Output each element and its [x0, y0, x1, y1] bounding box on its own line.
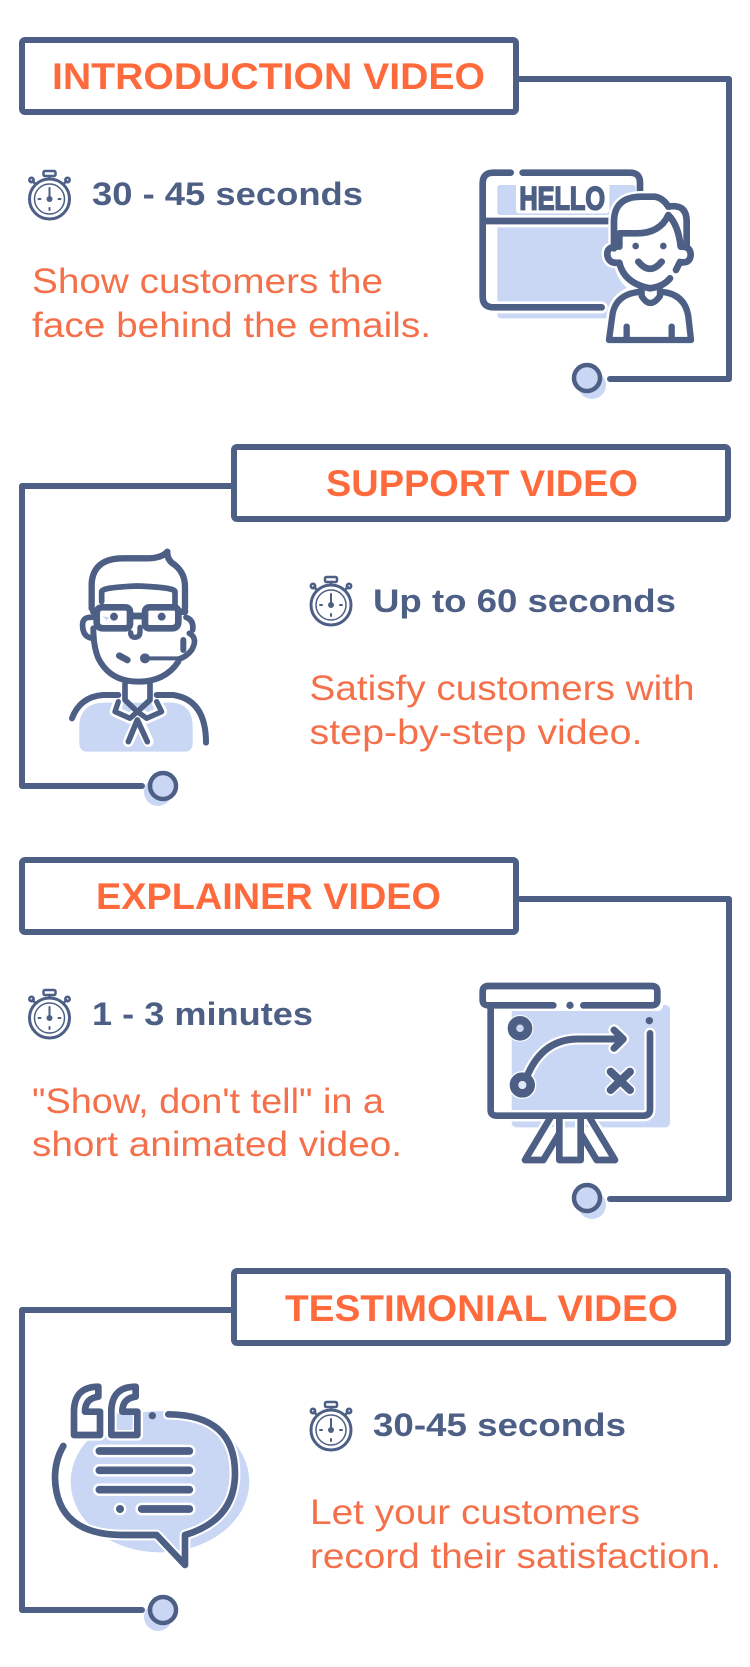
connector line: [22, 486, 233, 786]
duration text: 30-45 seconds: [373, 1407, 626, 1443]
node circle: [574, 365, 606, 399]
panel: testimonial video: [22, 1271, 728, 1631]
description: face behind the emails.: [32, 306, 431, 345]
icon: stopwatch: [29, 171, 70, 219]
description: "Show, don't tell" in a: [32, 1082, 385, 1121]
connector line: [520, 79, 729, 379]
description: step-by-step video.: [310, 713, 642, 752]
description: Let your customers: [310, 1493, 640, 1532]
node circle: [574, 1185, 606, 1219]
icon: stopwatch: [311, 1402, 351, 1450]
description: short animated video.: [32, 1125, 402, 1164]
heading box: INTRODUCTION VIDEO: [52, 56, 485, 97]
duration text: 30 - 45 seconds: [92, 176, 363, 212]
heading box: [234, 1271, 728, 1343]
description: [32, 1082, 402, 1164]
icon: speech bubble with quotes: [55, 1387, 249, 1565]
duration text: 1 - 3 minutes: [92, 996, 313, 1032]
description: [310, 669, 694, 752]
icon: hello window with person: HELLO: [519, 180, 605, 216]
node circle: [144, 1597, 176, 1631]
icon: support agent with headset: [72, 552, 206, 752]
node circle: [144, 773, 176, 806]
description: Show customers the: [32, 262, 383, 301]
heading box: [22, 40, 516, 112]
heading box: [234, 447, 728, 519]
heading box: SUPPORT VIDEO: [326, 463, 638, 504]
connector line: [520, 899, 729, 1199]
panel: explainer video: [22, 860, 729, 1219]
panel: support video: [22, 447, 728, 806]
icon: hello window with person: [483, 173, 691, 340]
heading box: TESTIMONIAL VIDEO: [285, 1288, 678, 1329]
heading box: [22, 860, 516, 932]
description: Satisfy customers with: [310, 669, 694, 708]
description: [310, 1493, 721, 1576]
panel: introduction video: [22, 40, 729, 399]
icon: stopwatch: [29, 990, 70, 1038]
icon: stopwatch: [311, 577, 351, 625]
connector line: [22, 1310, 233, 1610]
description: record their satisfaction.: [310, 1537, 721, 1576]
icon: presentation board: [483, 986, 670, 1160]
heading box: EXPLAINER VIDEO: [96, 876, 441, 917]
duration text: Up to 60 seconds: [373, 583, 676, 619]
description: [32, 262, 431, 345]
